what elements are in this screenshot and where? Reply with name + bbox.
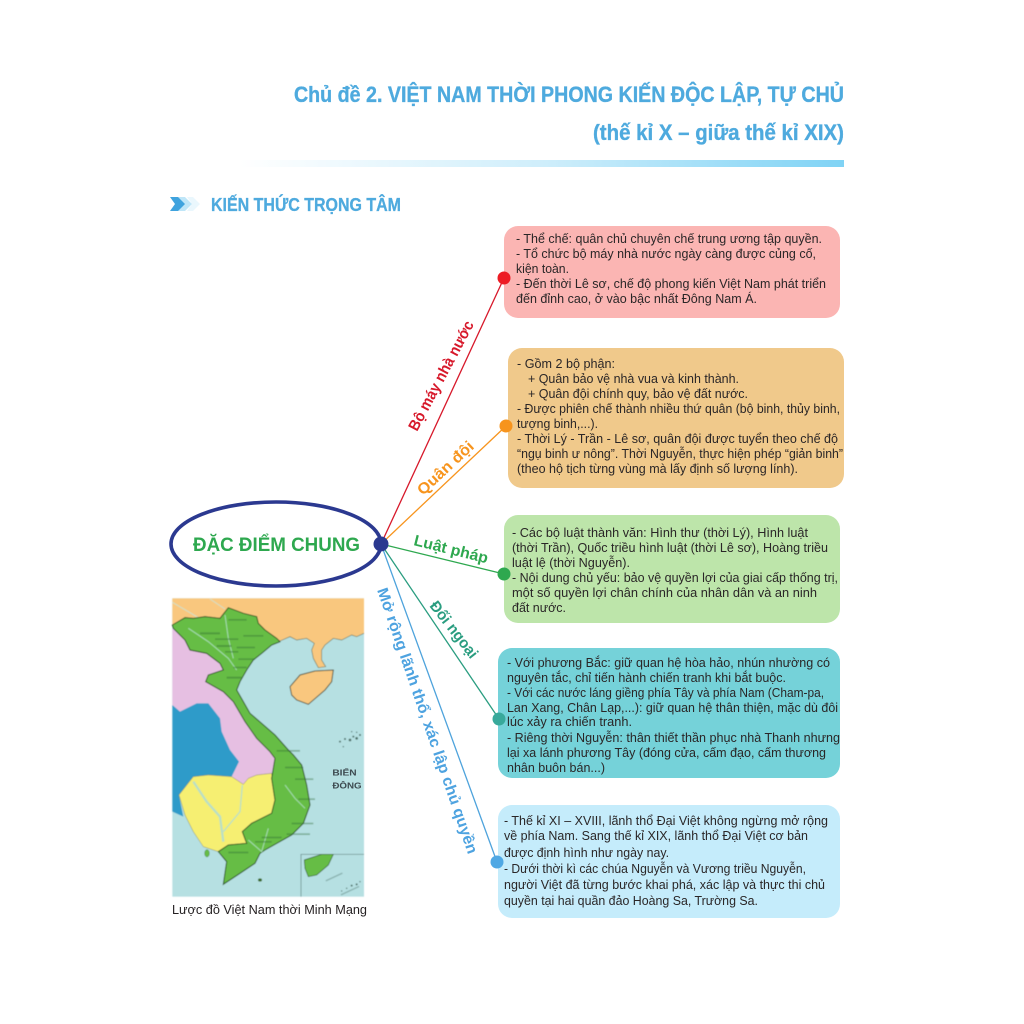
- panel: mở rộng lãnh thổ: quyền tại hai quần đảo Hoàng Sa, Trường Sa.: [504, 893, 758, 908]
- node: blue: [490, 856, 504, 868]
- panel: bộ máy nhà nước: kiện toàn.: [516, 261, 569, 276]
- central ellipse: ĐẶC ĐIỂM CHUNG: [193, 534, 360, 556]
- section heading: Kiến thức trọng tâm: [170, 194, 401, 215]
- node: red: [498, 272, 510, 284]
- panel: luật pháp: luật lệ (thời Nguyễn).: [512, 555, 630, 570]
- panel: bộ máy nhà nước: - Tổ chức bộ máy nhà nước ngày càng được củng cố,: [516, 246, 816, 261]
- place name hints: [200, 619, 315, 853]
- title: (thế kỉ X – giữa thế kỉ XIX): [593, 120, 844, 145]
- Phu Quoc island: [205, 850, 209, 857]
- panel: đối ngoại: lúc xảy ra chiến tranh.: [507, 714, 632, 729]
- panel: đối ngoại: Lan Xang, Chân Lạp,...): giữ quan hệ thân thiện, mặc dù đôi: [507, 700, 838, 715]
- panel: đối ngoại: nguyên tắc, chỉ tiến hành chiến tranh khi bắt buộc.: [507, 670, 786, 685]
- panel: quân đội: (theo hộ tịch từng vùng mà lấy định số lượng lính).: [517, 461, 798, 476]
- branch label: Luật pháp: Luật pháp: [412, 532, 490, 567]
- panel: bộ máy nhà nước: [504, 226, 840, 318]
- panel: đối ngoại: lại xa lánh phương Tây (đóng cửa, cấm đạo, cấm thương: [507, 745, 826, 760]
- China: [172, 598, 364, 668]
- panel: mở rộng lãnh thổ: - Dưới thời kì các chúa Nguyễn và Vương triều Nguyễn,: [504, 861, 806, 876]
- panel: đối ngoại: - Với phương Bắc: giữ quan hệ hòa hảo, nhún nhường có: [507, 655, 830, 670]
- Cambodia: [179, 773, 275, 852]
- Paracels: [339, 731, 361, 892]
- panel: quân đội: - Gồm 2 bộ phận:: [517, 356, 615, 371]
- panel: đối ngoại: [498, 648, 840, 778]
- Biển Đông label: BIỂN: [332, 767, 357, 778]
- connector lines: [381, 278, 506, 862]
- panel: mở rộng lãnh thổ: - Thế kỉ XI – XVIII, lãnh thổ Đại Việt không ngừng mở rộng: [504, 813, 828, 828]
- Biển Đông label: ĐÔNG: [332, 779, 362, 790]
- Inset island: [304, 854, 333, 877]
- central node: [374, 536, 388, 552]
- panel: luật pháp: (thời Trần), Quốc triều hình luật (thời Lê sơ), Hoàng triều: [512, 540, 828, 555]
- map of Vietnam: [172, 598, 364, 897]
- heading text: KIẾN THỨC TRỌNG TÂM: [211, 194, 401, 215]
- rivers in north and delta: [188, 628, 237, 670]
- panel: bộ máy nhà nước: - Đến thời Lê sơ, chế độ phong kiến Việt Nam phát triển: [516, 276, 826, 291]
- title: [294, 82, 844, 145]
- Inset frame: [301, 854, 364, 897]
- panel: quân đội: - Thời Lý - Trần - Lê sơ, quân đội được tuyển theo chế độ: [517, 431, 838, 446]
- panel: đối ngoại: - Riêng thời Nguyễn: thân thiết thần phục nhà Thanh nhưng: [507, 730, 840, 745]
- node: orange: [500, 420, 512, 432]
- central ellipse: [171, 502, 381, 586]
- title: Chủ đề 2. VIỆT NAM THỜI PHONG KIẾN ĐỘC LẬP, TỰ CHỦ: [294, 82, 844, 107]
- panel: luật pháp: một số quyền lợi chân chính của nhân dân và an ninh: [512, 585, 817, 600]
- node: teal: [492, 712, 506, 726]
- icon: chevrons: [170, 197, 200, 211]
- panel: quân đội: tượng binh,...).: [517, 416, 598, 431]
- map caption: Lược đồ Việt Nam thời Minh Mạng: [172, 902, 367, 917]
- panel: quân đội: [508, 348, 844, 488]
- panel: luật pháp: - Nội dung chủ yếu: bảo vệ quyền lợi của giai cấp thống trị,: [512, 570, 838, 585]
- panel: quân đội: + Quân đội chính quy, bảo vệ đất nước.: [528, 386, 748, 401]
- panel: luật pháp: đất nước.: [512, 600, 566, 615]
- node: green: [498, 568, 510, 580]
- panel: mở rộng lãnh thổ: về phía Nam. Sang thế kỉ XIX, lãnh thổ Đại Việt cơ bản: [504, 828, 808, 843]
- Laos: [172, 628, 275, 784]
- panel: quân đội: + Quân bảo vệ nhà vua và kinh thành.: [528, 371, 739, 386]
- branch label: Bộ máy nhà nước: Bộ máy nhà nước: [406, 318, 478, 434]
- Hainan: [290, 670, 333, 704]
- panel: đối ngoại: nhân buôn bán...): [507, 760, 605, 775]
- Cambodian rivers: [193, 782, 223, 842]
- China rivers: [172, 602, 198, 618]
- Biển Đông label: [332, 767, 362, 790]
- branch label: Đối ngoại: Đối ngoại: [426, 598, 481, 662]
- panel: bộ máy nhà nước: đến đỉnh cao, ở vào bậc nhất Đông Nam Á.: [516, 291, 757, 306]
- panel: luật pháp: [504, 515, 840, 623]
- panel: quân đội: - Được phiên chế thành nhiều thứ quân (bộ binh, thủy binh,: [517, 401, 840, 416]
- branch label: Mở rộng lãnh thổ, xác lập chủ quyền: Mở rộng lãnh thổ, xác lập chủ quyền: [373, 586, 480, 856]
- panel: bộ máy nhà nước: - Thể chế: quân chủ chuyên chế trung ương tập quyền.: [516, 231, 822, 246]
- panel: đối ngoại: - Với các nước láng giềng phía Tây và phía Nam (Cham-pa,: [507, 685, 824, 700]
- panel: luật pháp: - Các bộ luật thành văn: Hình thư (thời Lý), Hình luật: [512, 525, 808, 540]
- China coastline: [280, 633, 364, 668]
- panel: mở rộng lãnh thổ: [498, 805, 840, 918]
- panel: quân đội: “ngụ binh ư nông”. Thời Nguyễn, thực hiện phép “giản binh”: [517, 446, 843, 461]
- Con Dao island: [258, 878, 262, 882]
- Thailand: [172, 703, 239, 817]
- panel: mở rộng lãnh thổ: được định hình như ngày nay.: [504, 845, 669, 860]
- branch label: Quân đội: Quân đội: [414, 438, 478, 499]
- Vietnam mainland: [172, 608, 310, 884]
- panel: mở rộng lãnh thổ: người Việt đã từng bước khai phá, xác lập và thực thi chủ: [504, 877, 825, 892]
